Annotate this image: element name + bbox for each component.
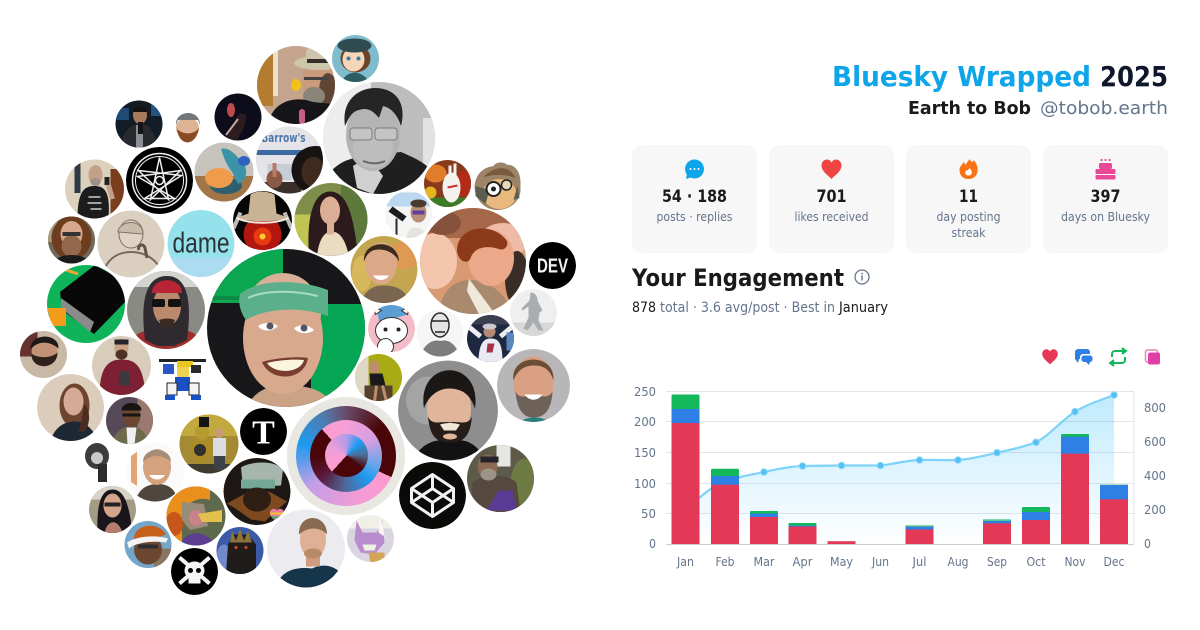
stat card: day posting streak: 11 bbox=[959, 187, 978, 207]
avatar: CodePen logo bbox=[399, 462, 466, 529]
right axis labels: 0 bbox=[1144, 537, 1151, 551]
avatar: woman in dark with red bbox=[214, 93, 262, 141]
icon: legend replies bbox=[1075, 349, 1092, 365]
avatar: hockey player raising trophy bbox=[466, 314, 514, 362]
month labels: Feb bbox=[716, 555, 734, 569]
avatar: woman with long dark hair bbox=[294, 182, 368, 256]
avatar: DEV logo bbox=[529, 242, 576, 289]
icon: legend quotes bbox=[1146, 350, 1160, 364]
bars: Mar bbox=[750, 511, 778, 544]
icon: heart bbox=[822, 160, 842, 179]
bars: Oct bbox=[1022, 507, 1050, 544]
bars: Feb bbox=[711, 469, 739, 544]
avatar: man with telescope bbox=[385, 191, 432, 238]
chart: monthly engagement bbox=[634, 385, 1166, 569]
month labels: Nov bbox=[1064, 555, 1086, 569]
avatar: pencil sketch portrait bbox=[98, 210, 164, 278]
avatar: Barrow's sign bbox=[256, 126, 323, 194]
avatar: faded grey silhouette bbox=[510, 289, 558, 336]
engagement summary line: January bbox=[838, 300, 888, 316]
stat card: posts and replies bbox=[632, 145, 757, 253]
icon: speech bubble bbox=[685, 160, 704, 179]
bars: Jul bbox=[906, 525, 934, 544]
left axis labels: 200 bbox=[634, 415, 656, 429]
avatar: santa hat man bbox=[124, 520, 172, 568]
stat card: days on Bluesky: days on Bluesky bbox=[1061, 209, 1151, 224]
left axis labels: 50 bbox=[641, 507, 656, 521]
avatar: orange snacks with blue glass bbox=[194, 142, 254, 202]
icon: legend heart bbox=[1042, 349, 1058, 364]
avatar: man in hat with duck bbox=[257, 46, 335, 124]
month labels: Jan bbox=[676, 555, 694, 569]
avatar: peanut mascot with man bbox=[179, 414, 239, 474]
cumulative line bbox=[686, 395, 1114, 510]
avatar: man in hoodie and sunglasses bbox=[127, 271, 205, 349]
month labels: Dec bbox=[1104, 555, 1124, 569]
avatar: PCB chip graphic bbox=[47, 265, 125, 343]
avatar: red-haired man bbox=[413, 208, 529, 314]
month labels: Aug bbox=[948, 555, 968, 569]
icon: legend reposts bbox=[1110, 348, 1126, 366]
right axis labels bbox=[1144, 401, 1166, 551]
cumulative points bbox=[761, 392, 1117, 475]
avatar: rabbit with pumpkins bbox=[424, 160, 472, 208]
stat card: likes received: likes received bbox=[794, 209, 868, 224]
right axis labels: 400 bbox=[1144, 469, 1166, 483]
avatar: smiling man with bandana, large bbox=[207, 249, 365, 408]
avatar: smiling brunette woman bbox=[37, 374, 104, 442]
bars: Sep bbox=[983, 519, 1011, 544]
avatar: seven-pointed star emblem bbox=[126, 147, 193, 214]
engagement summary line: total · 3.6 avg/post · Best in bbox=[660, 300, 835, 316]
month labels: Jul bbox=[912, 555, 926, 569]
stat card: posts and replies: 54 · 188 bbox=[662, 187, 727, 207]
stat card: day posting streak: day posting bbox=[936, 209, 1000, 224]
avatar: bearded smiling man bbox=[497, 349, 570, 424]
left axis labels: 150 bbox=[634, 446, 656, 460]
avatar: concentric ring logo bbox=[287, 397, 405, 515]
bars: May bbox=[828, 541, 856, 544]
avatar: black ink scribble mask bbox=[85, 443, 109, 482]
cumulative area bbox=[686, 395, 1114, 544]
right axis labels: 200 bbox=[1144, 503, 1166, 517]
avatar: black and white portrait bbox=[319, 82, 435, 198]
left axis labels: 100 bbox=[634, 477, 656, 491]
icon: info bbox=[855, 270, 869, 284]
right axis labels: 800 bbox=[1144, 401, 1166, 415]
avatar: man with microphone bbox=[115, 100, 163, 148]
stat card: posts and replies: posts · replies bbox=[656, 209, 732, 224]
stat card: day posting streak bbox=[906, 145, 1031, 253]
avatar: pixel-art robot warrior bbox=[159, 359, 206, 400]
icon: birthday cake bbox=[1096, 159, 1116, 180]
left axis labels: 0 bbox=[649, 537, 656, 551]
bars: Jan bbox=[672, 394, 700, 544]
avatar: man in dark blue sweater bbox=[267, 510, 345, 588]
engagement summary line: 878 bbox=[632, 300, 656, 316]
title: 2025 bbox=[1100, 60, 1168, 93]
chart gridlines bbox=[666, 392, 1134, 544]
avatar: NYT logo bbox=[240, 408, 287, 455]
avatar: armored dark knight bbox=[216, 526, 264, 574]
stat card: likes received: 701 bbox=[816, 187, 846, 207]
stat card: days on Bluesky: 397 bbox=[1090, 187, 1120, 207]
stat card: likes received bbox=[769, 145, 894, 253]
stat card: day posting streak: streak bbox=[952, 225, 986, 240]
stat card: days on Bluesky bbox=[1043, 145, 1168, 253]
subtitle: display name and handle: @tobob.earth bbox=[1040, 98, 1168, 119]
avatar: smiling man with autumn background bbox=[350, 236, 420, 304]
avatar: DEV logo: DEV bbox=[537, 256, 568, 278]
avatar: dame logo: dame bbox=[172, 228, 230, 260]
avatar: man with purple shirt outdoors bbox=[466, 444, 538, 512]
avatar: man with glasses and suit bbox=[106, 396, 154, 444]
month labels: Oct bbox=[1026, 555, 1046, 569]
bars: Nov bbox=[1061, 434, 1089, 544]
month labels bbox=[676, 555, 1124, 569]
right axis labels: 600 bbox=[1144, 435, 1166, 449]
avatar: dog with hat and rainbow heart bbox=[224, 458, 290, 525]
avatar: skull and wrenches logo bbox=[171, 548, 218, 595]
avatar: cowboy hat over HAL eye bbox=[233, 191, 292, 254]
avatar: cartoon face with glasses bbox=[474, 162, 520, 210]
avatar: Barrow's sign: Barrow's bbox=[262, 131, 306, 145]
avatar: cartoon bearded man in beanie bbox=[176, 113, 200, 142]
title: Bluesky Wrapped bbox=[832, 60, 1091, 93]
avatar: man with mustache and goatee bbox=[398, 360, 498, 460]
avatar: lynx with flames bbox=[165, 486, 226, 546]
avatar: ink drawing of a bald man bbox=[416, 310, 464, 357]
month labels: Jun bbox=[871, 555, 889, 569]
avatar: anime character with cap bbox=[332, 34, 380, 82]
avatar: long-haired bearded man bbox=[48, 216, 96, 264]
legend icons bbox=[1042, 348, 1160, 366]
icon: flame bbox=[960, 159, 978, 179]
avatar: man in maroon shirt bbox=[92, 336, 152, 396]
subtitle: display name and handle: Earth to Bob bbox=[908, 98, 1031, 119]
left axis labels: 250 bbox=[634, 385, 656, 399]
month labels: May bbox=[830, 555, 853, 569]
avatar: white cartoon cat with KC cap bbox=[368, 304, 415, 354]
avatar: woman with glasses and long dark hair bbox=[88, 486, 136, 534]
bars: Apr bbox=[788, 523, 816, 544]
avatar: bearded man dark red background bbox=[20, 330, 68, 378]
avatar: bald man selfie bbox=[64, 159, 124, 219]
left axis labels bbox=[634, 385, 656, 551]
avatar: dame logo bbox=[167, 210, 235, 278]
month labels: Mar bbox=[754, 555, 775, 569]
subtitle: display name and handle bbox=[908, 98, 1168, 119]
heading: Your Engagement: Your Engagement bbox=[631, 264, 844, 292]
month labels: Sep bbox=[987, 555, 1007, 569]
avatar: NYT logo: T bbox=[252, 414, 275, 452]
avatar: woman on lime background bbox=[354, 354, 402, 402]
bars: Dec bbox=[1100, 484, 1128, 544]
month labels: Apr bbox=[792, 555, 813, 569]
avatar: smiling man on white with plaid shirt bbox=[131, 449, 176, 502]
avatar: purple cat character bbox=[346, 514, 394, 562]
